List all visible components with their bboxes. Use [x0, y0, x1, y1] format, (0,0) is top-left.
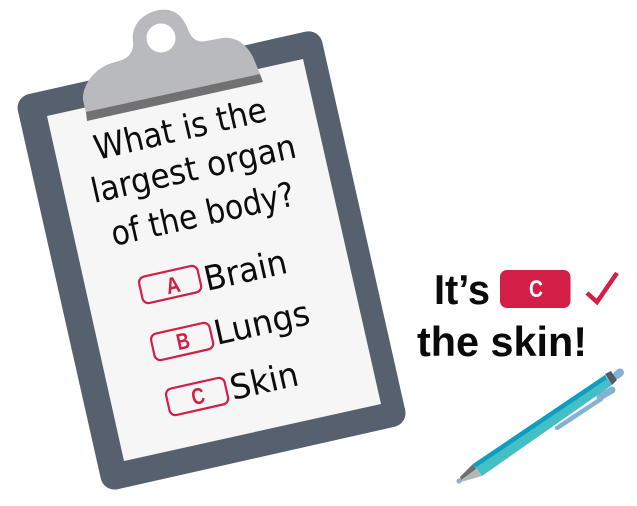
answer A: Brain	[200, 242, 291, 300]
question text: What is the	[90, 90, 271, 169]
answer B: B	[174, 327, 192, 355]
answer C	[165, 355, 302, 416]
answer A	[138, 242, 291, 304]
metal clip	[83, 10, 263, 121]
answer B: Lungs	[210, 293, 314, 354]
answer C: Skin	[226, 355, 302, 409]
red C badge: C	[529, 276, 543, 303]
question text: largest organ	[87, 127, 300, 212]
paper sheet	[47, 59, 381, 461]
question text	[87, 90, 300, 255]
answer A: A	[163, 271, 183, 299]
clipboard	[15, 10, 408, 492]
question text: of the body?	[107, 175, 298, 255]
icon: check mark	[587, 273, 617, 302]
answer reveal	[417, 266, 617, 365]
answer C: C	[189, 382, 207, 410]
answer B	[150, 293, 314, 361]
red C badge	[500, 270, 570, 308]
icon: pen	[456, 371, 620, 484]
text: the skin!: the skin!	[417, 318, 587, 365]
clipboard board	[15, 29, 408, 492]
text: It's: It’s	[434, 266, 490, 313]
